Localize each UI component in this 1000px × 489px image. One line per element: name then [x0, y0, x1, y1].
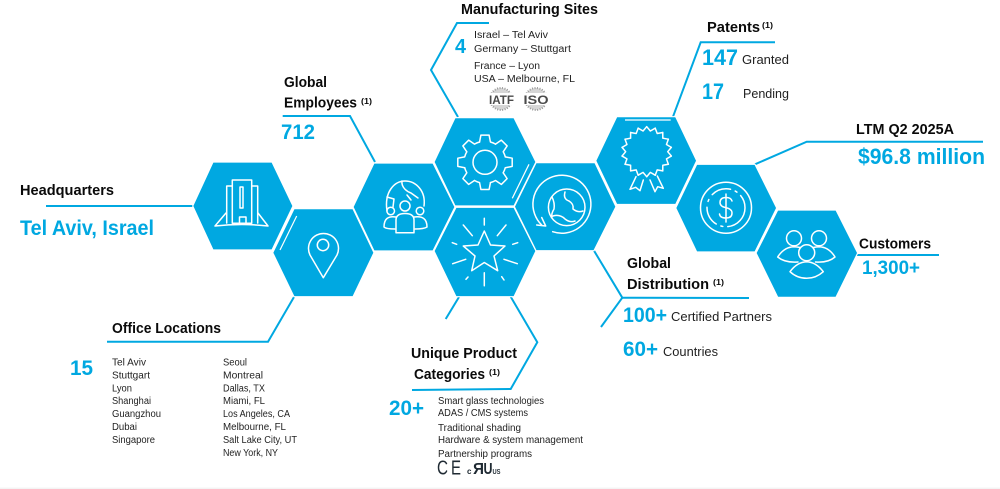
icon: CE and UL marks: U	[484, 461, 492, 478]
icon: star with rays	[452, 218, 518, 286]
text block: unique product categories: 20+	[389, 397, 424, 420]
text block: unique product categories: (1)	[489, 368, 500, 377]
text block: unique product categories: Unique Product	[411, 346, 517, 362]
text block: revenue: LTM Q2 2025A	[856, 122, 955, 138]
text block: office locations: Los Angeles, CA	[223, 409, 290, 420]
hexagon: global employees	[353, 163, 455, 251]
text block: global employees: Global	[284, 75, 327, 91]
text block: unique product categories: Categories	[414, 367, 485, 383]
text block: office locations	[70, 321, 297, 459]
text block: patents: (1)	[762, 21, 773, 30]
text block: office locations: Melbourne, FL	[223, 422, 286, 433]
text block: global distribution	[623, 256, 772, 361]
text block: revenue	[856, 122, 985, 169]
hexagon: customers	[756, 210, 858, 297]
icon: CE and UL marks	[437, 458, 501, 480]
text block: office locations: Salt Lake City, UT	[223, 435, 297, 446]
icon: office buildings	[215, 180, 268, 226]
icon: award ribbon	[621, 125, 673, 192]
text block: global distribution: Global	[627, 256, 671, 272]
text block: office locations: Lyon	[112, 384, 132, 394]
text block: patents	[702, 20, 789, 104]
icon: group of people	[778, 231, 835, 278]
text block: patents: 147	[702, 45, 738, 70]
icon: CE and UL marks: c	[467, 467, 472, 476]
icon: globe with circular arrow	[533, 175, 591, 233]
text block: headquarters: Headquarters	[20, 183, 114, 199]
text block: global distribution: Certified Partners	[671, 310, 772, 324]
text block: patents: 17	[702, 79, 724, 104]
text block: global distribution: 100+	[623, 304, 667, 327]
icon: globe with people	[384, 181, 427, 233]
hexagon: patents	[596, 117, 697, 204]
text block: office locations: Guangzhou	[112, 409, 161, 420]
hexagon: office locations	[273, 209, 374, 297]
text block: office locations: Miami, FL	[223, 396, 265, 407]
hexagon: global distribution	[514, 163, 616, 251]
text block: manufacturing sites: Manufacturing Sites	[461, 2, 598, 18]
text block: patents: Granted	[742, 53, 789, 67]
text block: office locations: Office Locations	[112, 321, 221, 337]
icon: ISO certification badge: ISO	[524, 95, 549, 107]
text block: unique product categories	[389, 346, 583, 460]
text block: office locations: Tel Aviv	[112, 358, 146, 368]
icon: CE and UL marks: US	[492, 469, 501, 476]
text block: manufacturing sites: USA – Melbourne, FL	[474, 74, 575, 85]
icon: CE and UL marks: R	[473, 461, 484, 478]
text block: customers	[859, 236, 931, 279]
text block: office locations: Stuttgart	[112, 370, 150, 382]
text block: unique product categories: ADAS / CMS systems	[438, 408, 528, 419]
text block: unique product categories: Smart glass technologies	[438, 396, 544, 407]
text block: office locations: Montreal	[223, 370, 263, 382]
text block: global distribution: Distribution	[627, 277, 709, 293]
icon: CE and UL marks: E	[451, 458, 461, 480]
text block: customers: Customers	[859, 236, 931, 252]
text block: customers: 1,300+	[862, 258, 920, 279]
text block: headquarters	[20, 183, 154, 240]
text block: global employees: Employees	[284, 96, 357, 112]
icon: ISO certification badge	[523, 88, 549, 110]
text block: patents: Pending	[743, 87, 789, 101]
text block: office locations: Shanghai	[112, 396, 151, 407]
text block: manufacturing sites: 4	[455, 36, 467, 58]
hexagon: unique product categories	[434, 207, 536, 297]
icon: gear	[458, 135, 512, 190]
text block: patents: Patents	[707, 20, 760, 36]
text block: global distribution: (1)	[713, 278, 724, 287]
text block: global distribution: Countries	[663, 345, 718, 359]
text block: unique product categories: Partnership programs	[438, 449, 532, 460]
text block: office locations: Dallas, TX	[223, 384, 265, 394]
text block: office locations: Dubai	[112, 422, 137, 433]
text block: manufacturing sites: Germany – Stuttgart	[474, 44, 571, 55]
connector lines	[46, 23, 983, 390]
icon: IATF certification badge: IATF	[489, 95, 514, 107]
text block: unique product categories: Hardware & system management	[438, 435, 583, 446]
icon: dollar coin	[700, 182, 752, 233]
hexagon: revenue	[676, 164, 777, 252]
text block: global employees: (1)	[361, 97, 372, 106]
text block: global employees: 712	[281, 121, 315, 144]
icon: CE and UL marks: C	[437, 458, 448, 480]
text block: revenue: $96.8 million	[858, 144, 985, 169]
text block: manufacturing sites	[455, 2, 598, 85]
text block: headquarters: Tel Aviv, Israel	[20, 217, 154, 240]
text block: manufacturing sites: Israel – Tel Aviv	[474, 30, 548, 41]
text block: manufacturing sites: France – Lyon	[474, 61, 540, 72]
icon: map pin	[308, 233, 338, 278]
text block: office locations: 15	[70, 357, 93, 380]
text block: office locations: Singapore	[112, 435, 155, 446]
text block: office locations: Seoul	[223, 358, 247, 368]
text block: unique product categories: Traditional shading	[438, 423, 521, 434]
hexagon: manufacturing sites	[434, 118, 536, 206]
text block: global employees	[281, 75, 372, 144]
text block: office locations: New York, NY	[223, 448, 278, 459]
hexagon: headquarters	[193, 162, 293, 250]
text block: global distribution: 60+	[623, 338, 658, 361]
icon: IATF certification badge	[488, 88, 514, 110]
